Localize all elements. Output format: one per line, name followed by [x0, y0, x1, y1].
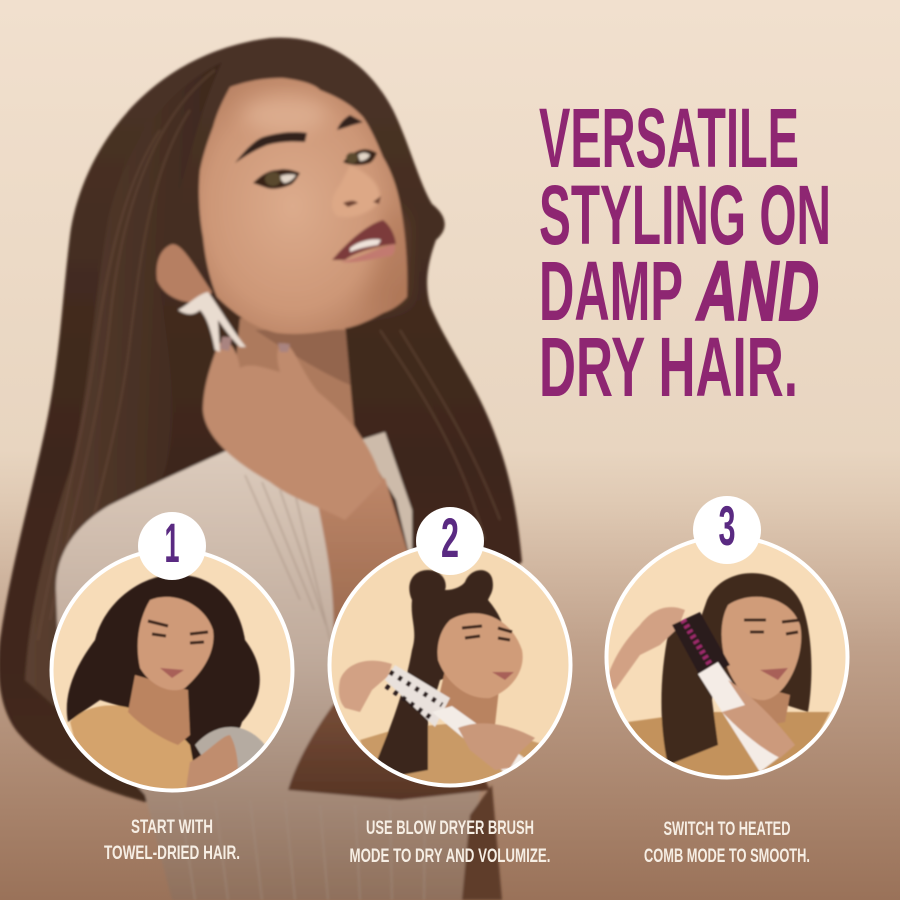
- lips: [492, 672, 514, 680]
- brows and eyes: [744, 620, 800, 634]
- face: [138, 597, 213, 690]
- hand: [203, 342, 382, 520]
- neck: [235, 318, 385, 505]
- hand: [186, 734, 238, 788]
- hand right: [458, 723, 535, 770]
- left eyebrow: [235, 132, 307, 163]
- torso skin: [462, 785, 502, 900]
- sweater ribs: [180, 475, 425, 900]
- towel: [194, 726, 264, 768]
- shirt: [628, 711, 830, 776]
- hair: [661, 573, 811, 765]
- face: [199, 78, 407, 334]
- nails: [220, 337, 290, 352]
- brows and eyes: [148, 621, 208, 643]
- caption 2: MODE TO DRY AND VOLUMIZE.: [350, 846, 550, 867]
- face: [438, 613, 523, 698]
- neck: [735, 684, 791, 724]
- number badge 3: [693, 494, 761, 564]
- nose: [332, 165, 380, 217]
- number badge 1: 1: [164, 511, 180, 574]
- sweater: [56, 450, 480, 900]
- brush handle: [698, 662, 782, 772]
- lips: [160, 668, 184, 678]
- brush barrel stripe: [683, 620, 712, 668]
- caption 1: TOWEL-DRIED HAIR.: [104, 843, 240, 864]
- brows and eyes: [462, 626, 512, 640]
- brush head: [672, 612, 730, 680]
- hair with buns: [372, 570, 505, 778]
- brush head: [385, 665, 450, 727]
- curly hair: [67, 575, 260, 770]
- lips: [760, 668, 788, 680]
- photo circle 3: [605, 535, 849, 790]
- caption 1: START WITH: [131, 817, 213, 838]
- heading: [539, 91, 831, 414]
- hair strands: [38, 70, 500, 640]
- brush bristles: [386, 672, 442, 720]
- photo circle 2: [328, 543, 572, 790]
- earring: [178, 292, 246, 352]
- ear: [157, 244, 212, 303]
- caption 2: USE BLOW DRYER BRUSH: [366, 818, 534, 839]
- number badge 3: 3: [718, 494, 736, 557]
- caption 3: COMB MODE TO SMOOTH.: [644, 846, 810, 867]
- neck: [128, 675, 190, 745]
- top: [69, 704, 194, 788]
- shoulder: [360, 724, 540, 784]
- forearm: [288, 640, 490, 800]
- nostril: [343, 196, 381, 207]
- number badge 2: 2: [441, 506, 459, 569]
- right eyebrow: [337, 115, 363, 130]
- step 3: [605, 494, 849, 867]
- neck shadow: [255, 330, 350, 385]
- number badge 1: [138, 511, 206, 580]
- face: [722, 597, 801, 700]
- cheek shade: [360, 205, 405, 310]
- caption 3: SWITCH TO HEATED: [664, 819, 790, 840]
- hand: [722, 680, 795, 758]
- forehead highlight: [243, 97, 327, 133]
- lips: [332, 220, 396, 262]
- raised hand: [606, 607, 685, 690]
- brush handle: [434, 705, 524, 772]
- hair: [0, 38, 522, 802]
- hair highlight: [25, 62, 222, 720]
- heading line 3: DAMP: [539, 244, 683, 338]
- hand left: [339, 661, 392, 712]
- neck: [440, 672, 499, 725]
- heading line 3 emphasis: AND: [696, 244, 819, 338]
- sweater sliver: [360, 432, 412, 566]
- main photo: woman: [0, 38, 522, 900]
- step 1: [50, 511, 294, 864]
- number badge 2: [416, 506, 484, 575]
- wrist: [316, 478, 420, 640]
- photo circle 1: [50, 548, 294, 800]
- step 2: [328, 506, 572, 867]
- left eye: [253, 169, 300, 189]
- right eye: [343, 149, 377, 165]
